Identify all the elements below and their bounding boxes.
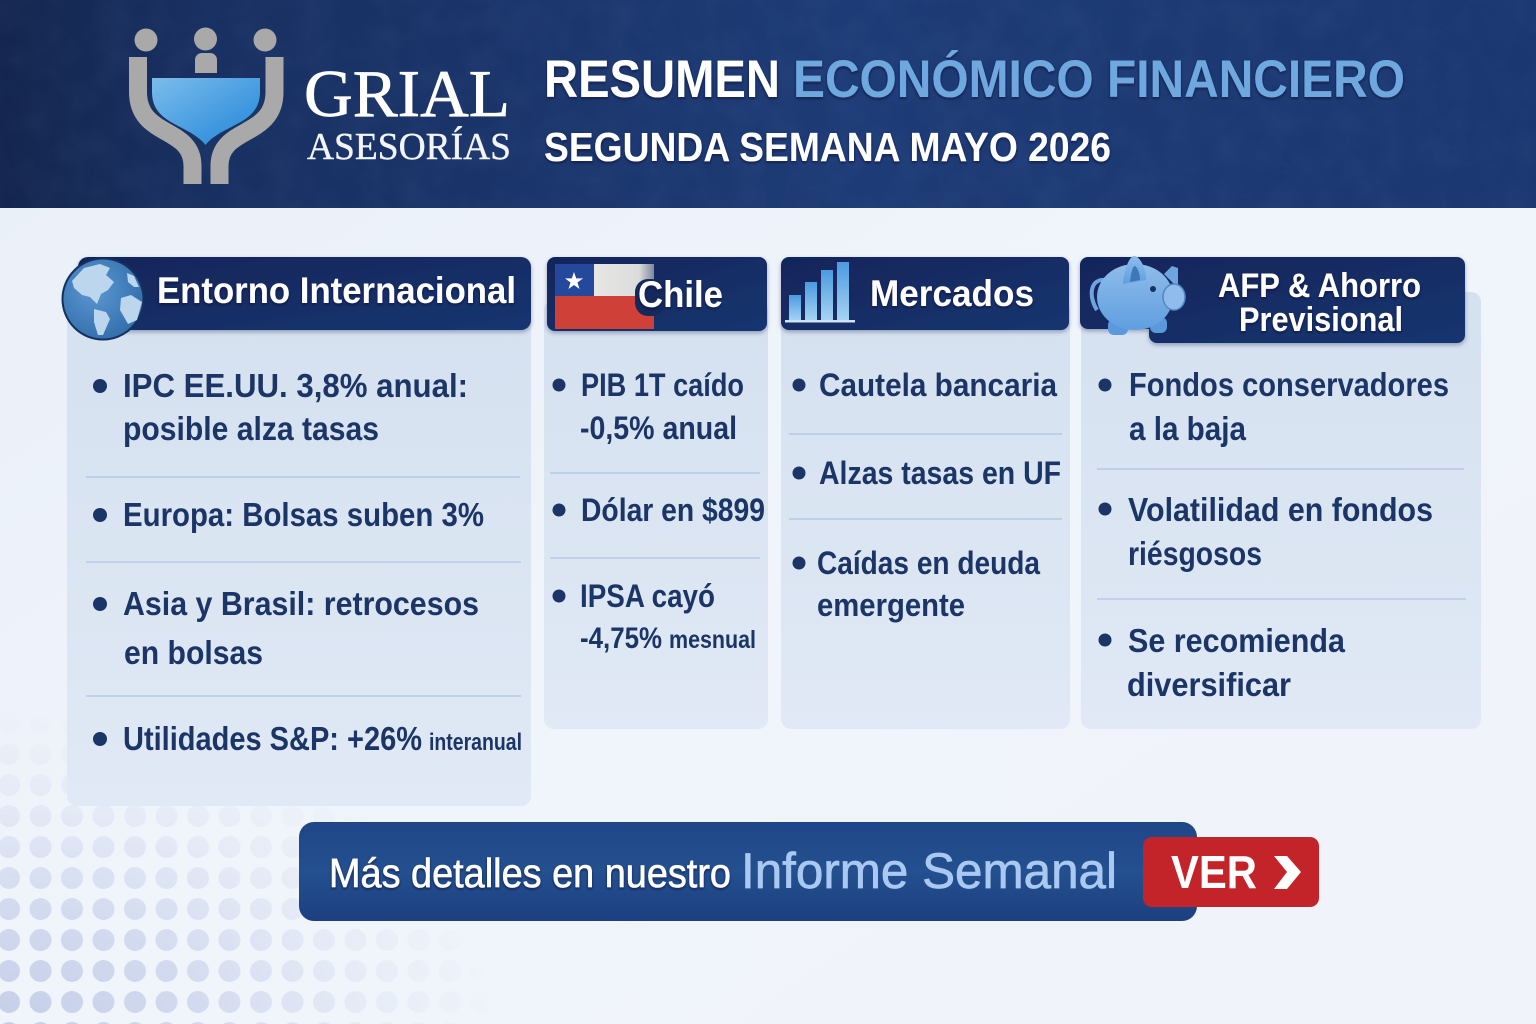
icon: chevron arrow <box>1274 856 1301 889</box>
item: Caídas en deuda: emergente <box>817 587 965 623</box>
panel heading bar <box>78 257 531 330</box>
panel: Chile <box>544 257 768 729</box>
item: Europa: Europa: Bolsas suben 3% <box>123 496 484 533</box>
item: PIB: PIB 1T caído <box>581 367 744 403</box>
item: Fondos conservadores <box>1098 366 1449 447</box>
logo wordmark ASESORÍAS: ASESORÍAS <box>307 126 511 168</box>
item: Caídas en deuda: Caídas en deuda <box>817 545 1040 581</box>
item: Asia y Brasil <box>93 585 479 671</box>
banner text: Más detalles en nuestro <box>329 850 731 896</box>
halftone dots decoration <box>0 778 394 1024</box>
panel heading: Chile: Chile <box>638 274 723 315</box>
panel heading bar <box>1080 257 1465 343</box>
panel heading bar: AFP & Ahorro <box>1218 267 1421 305</box>
logo wordmark GRIAL: GRIAL <box>304 57 510 131</box>
item: Cautela bancaria: Cautela bancaria <box>819 367 1057 403</box>
panel heading bar: Entorno Internacional <box>157 270 516 311</box>
item: Se recomienda diversificar: Se recomienda <box>1128 622 1346 659</box>
button: VER <box>1143 837 1319 907</box>
panel heading bar: Mercados <box>870 273 1034 314</box>
item: IPC EE.UU.: posible alza tasas <box>123 410 379 447</box>
item: IPSA: IPSA cayó <box>580 578 715 614</box>
panel heading bar <box>547 257 767 331</box>
item: Alzas tasas: Alzas tasas en UF <box>819 455 1061 491</box>
subtitle: SEGUNDA SEMANA MAYO 2026 <box>544 124 1111 170</box>
item: Volatilidad: Volatilidad en fondos <box>1128 491 1433 528</box>
item: Utilidades S&P: interanual <box>429 729 522 756</box>
panel body <box>544 300 768 729</box>
banner highlight text: Informe Semanal <box>741 843 1117 899</box>
icon: globe <box>62 258 144 340</box>
item: Caídas en deuda <box>792 545 1040 623</box>
icon: Chilean flag <box>555 264 665 329</box>
item: PIB <box>552 367 744 446</box>
title <box>544 49 1405 109</box>
item: IPC EE.UU. <box>93 367 468 447</box>
item: Asia y Brasil: Asia y Brasil: retrocesos <box>123 585 479 622</box>
item: Fondos conservadores: Fondos conservadores <box>1129 366 1449 403</box>
item: IPSA: -4,75% <box>580 622 662 655</box>
header band <box>0 0 1536 208</box>
item: Volatilidad: riésgosos <box>1128 535 1262 572</box>
item: Volatilidad <box>1098 491 1433 572</box>
item: Se recomienda diversificar: diversificar <box>1127 666 1291 703</box>
call to action banner <box>299 822 1319 921</box>
panel: AFP & Ahorro Previsional <box>1080 256 1481 729</box>
panel body <box>1081 292 1481 729</box>
item: Fondos conservadores: a la baja <box>1129 410 1247 447</box>
panel body <box>781 300 1070 729</box>
logo: Grial Asesorías <box>134 28 511 184</box>
title: RESUMEN <box>544 50 780 109</box>
panel heading bar <box>781 257 1069 330</box>
item: Se recomienda diversificar <box>1098 622 1346 703</box>
panel heading bar: Previsional <box>1239 301 1403 339</box>
title: ECONÓMICO FINANCIERO <box>793 49 1405 109</box>
item: IPSA: mesnual <box>669 626 756 654</box>
item: Utilidades S&P: Utilidades S&P: +26% <box>123 720 422 757</box>
panel: Mercados <box>781 257 1070 729</box>
icon: piggy bank <box>1092 256 1185 335</box>
item: IPC EE.UU.: IPC EE.UU. 3,8% anual: <box>123 367 468 404</box>
icon: bar chart <box>785 262 855 322</box>
logo mark: chalice and three figures <box>134 28 276 184</box>
item: IPSA <box>552 578 756 655</box>
panel: Entorno Internacional <box>62 257 531 806</box>
item: Asia y Brasil: en bolsas <box>124 634 263 671</box>
panel body <box>67 300 531 806</box>
item: PIB: -0,5% anual <box>580 410 737 446</box>
button: VER: VER <box>1171 846 1257 898</box>
item: Dólar: Dólar en $899 <box>581 492 765 528</box>
